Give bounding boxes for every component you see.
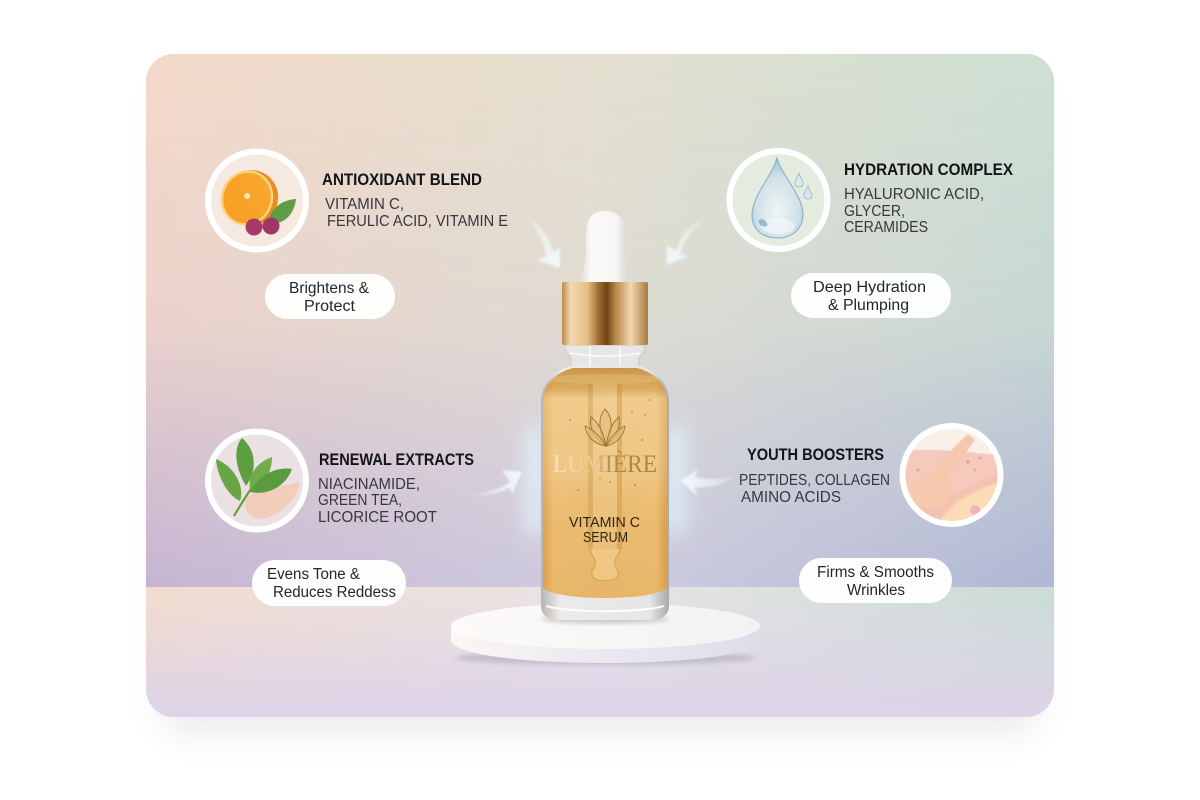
icon: orange and berries [208,152,306,250]
ingredients: AMINO ACIDS [741,489,841,506]
arrow: top left [528,217,560,268]
benefit pill: Reduces Reddess [273,584,396,601]
ingredients: GLYCER, [844,203,905,220]
dropper pipette [590,549,620,581]
benefit pill [265,274,395,319]
bottle glow [526,425,684,535]
icon: green tea leaves [208,432,306,530]
benefit pill: Protect [304,298,356,315]
bottle contact shadow [541,614,669,624]
heading: ANTIOXIDANT BLEND [322,171,482,189]
platform [451,603,760,665]
ingredients: PEPTIDES, COLLAGEN [739,472,890,489]
benefit pill: Brightens & [289,280,370,297]
backdrop wall [146,54,1054,587]
serum liquid [541,366,669,600]
heading: YOUTH BOOSTERS [747,446,884,464]
ingredients [739,472,890,506]
icon: water drop [730,151,828,249]
callout: youth boosters [739,426,1005,603]
product name: SERUM [583,529,628,546]
benefit pill: Evens Tone & [267,566,361,583]
benefit pill [791,273,951,318]
ingredients: NIACINAMIDE, [318,476,420,493]
heading: HYDRATION COMPLEX [844,161,1013,179]
product: serum bottle [541,211,669,624]
benefit pill: & Plumping [828,297,909,314]
gold collar [562,282,648,345]
ingredients [325,196,508,230]
product name: VITAMIN C [569,514,640,531]
glass base highlight [546,606,664,611]
ingredients [318,476,438,526]
callout: antioxidant blend [208,152,508,319]
glass body [541,366,669,620]
callout: hydration complex [730,151,1013,318]
neck lines [570,346,640,368]
gold flecks [569,399,651,491]
benefit pill [799,558,952,603]
arrow: lower left [465,470,522,496]
dropper bulb [579,211,629,283]
ingredients [844,186,984,236]
brand name: LUMIÈRE [553,450,657,478]
arrow: top right [667,218,705,265]
ingredients: LICORICE ROOT [318,509,438,526]
ingredients: GREEN TEA, [318,492,402,509]
floor surface [146,587,1054,717]
ingredients: VITAMIN C, [325,196,404,213]
panel: gradient card [146,54,1054,717]
ingredients: HYALURONIC ACID, [844,186,984,203]
ingredients: FERULIC ACID, VITAMIN E [327,213,508,230]
card shadow [160,80,1040,735]
benefit pill: Firms & Smooths [817,564,934,581]
product name [569,514,640,546]
arrow: lower right [681,469,738,496]
ingredients: CERAMIDES [844,219,928,236]
callout: renewal extracts [208,432,474,606]
logo: lotus [585,409,625,446]
benefit pill: Deep Hydration [813,279,926,296]
icon: skin layers [900,426,1005,525]
heading: RENEWAL EXTRACTS [319,451,474,469]
glass neck [565,345,645,368]
benefit pill: Wrinkles [847,582,905,599]
benefit pill [252,560,406,606]
